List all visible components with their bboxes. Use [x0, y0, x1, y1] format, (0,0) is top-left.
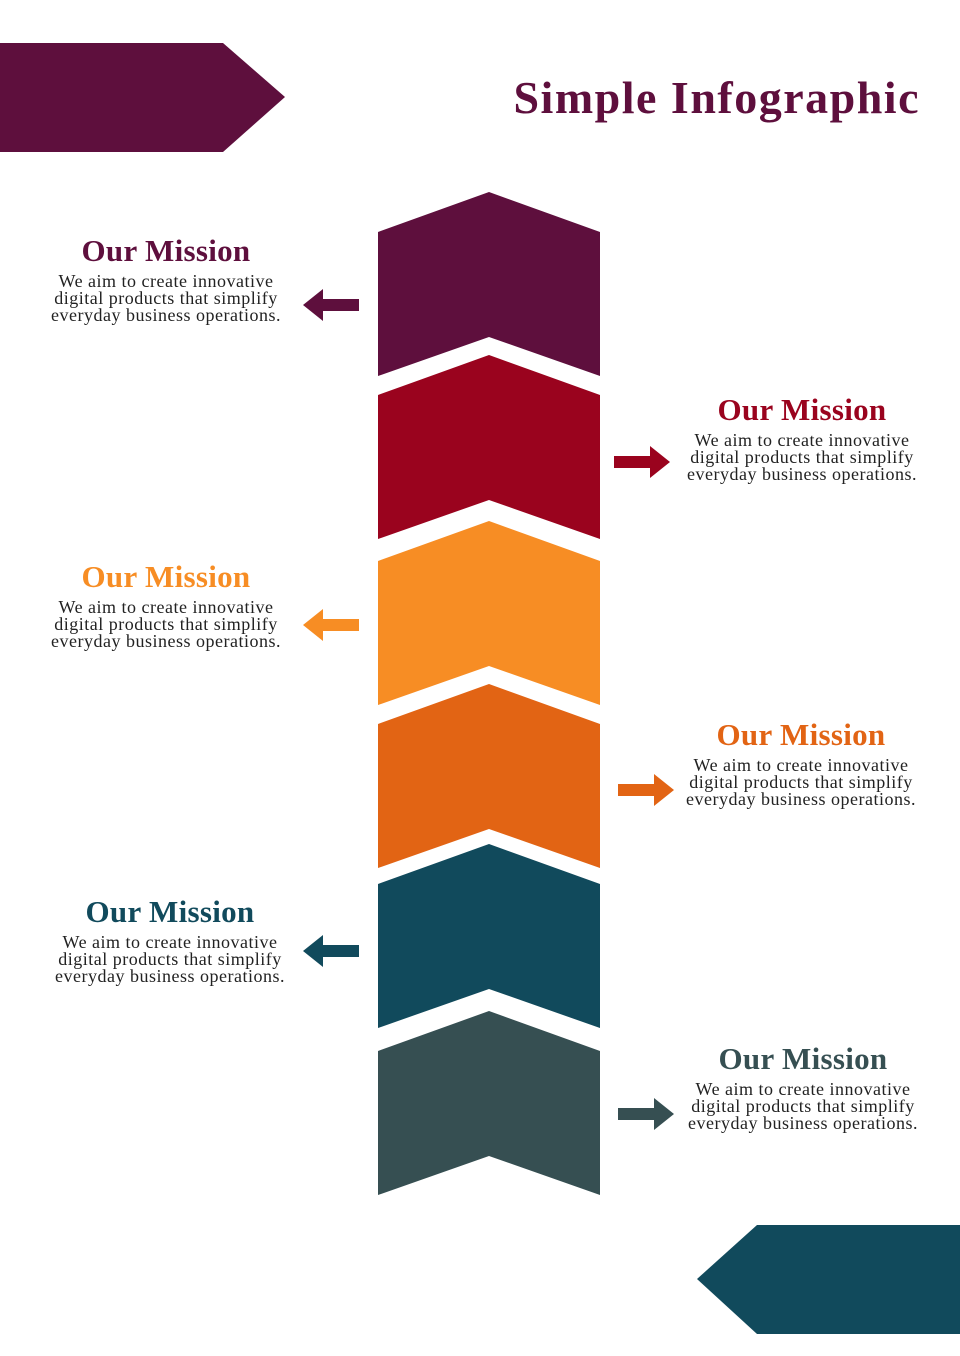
- text block 5: digital products that simplify: [58, 949, 282, 969]
- text block 2: digital products that simplify: [690, 447, 914, 467]
- arrow: left 5: [303, 935, 359, 967]
- text block 3: Our Mission: [82, 559, 250, 594]
- arrow: left 1: [303, 289, 359, 321]
- text block 4: everyday business operations.: [686, 789, 916, 809]
- text block 3: We aim to create innovative: [59, 597, 273, 617]
- text block 1: digital products that simplify: [54, 288, 278, 308]
- arrow: left 3: [303, 609, 359, 641]
- text block 6: We aim to create innovative: [696, 1079, 910, 1099]
- arrow: right 2: [614, 446, 670, 478]
- text block 4: We aim to create innovative: [694, 755, 908, 775]
- text block 5: We aim to create innovative: [63, 932, 277, 952]
- text block 1: We aim to create innovative: [59, 271, 273, 291]
- bottom banner arrow: [697, 1225, 960, 1334]
- text block 5: [55, 894, 285, 986]
- text block 4: [686, 717, 916, 809]
- title: Simple Infographic: [513, 72, 920, 123]
- text block 2: [687, 392, 917, 484]
- text block 6: everyday business operations.: [688, 1113, 918, 1133]
- text block 5: everyday business operations.: [55, 966, 285, 986]
- text block 1: Our Mission: [82, 233, 250, 268]
- text block 4: digital products that simplify: [689, 772, 913, 792]
- text block 6: [688, 1041, 918, 1133]
- text block 2: everyday business operations.: [687, 464, 917, 484]
- text block 5: Our Mission: [86, 894, 254, 929]
- arrow: right 4: [618, 774, 674, 806]
- text block 1: everyday business operations.: [51, 305, 281, 325]
- text block 3: everyday business operations.: [51, 631, 281, 651]
- text block 3: digital products that simplify: [54, 614, 278, 634]
- text block 2: Our Mission: [718, 392, 886, 427]
- text block 2: We aim to create innovative: [695, 430, 909, 450]
- text block 4: Our Mission: [717, 717, 885, 752]
- arrow: right 6: [618, 1098, 674, 1130]
- text block 6: digital products that simplify: [691, 1096, 915, 1116]
- top banner arrow: [0, 43, 285, 152]
- text block 1: [51, 233, 281, 325]
- text block 3: [51, 559, 281, 651]
- text block 6: Our Mission: [719, 1041, 887, 1076]
